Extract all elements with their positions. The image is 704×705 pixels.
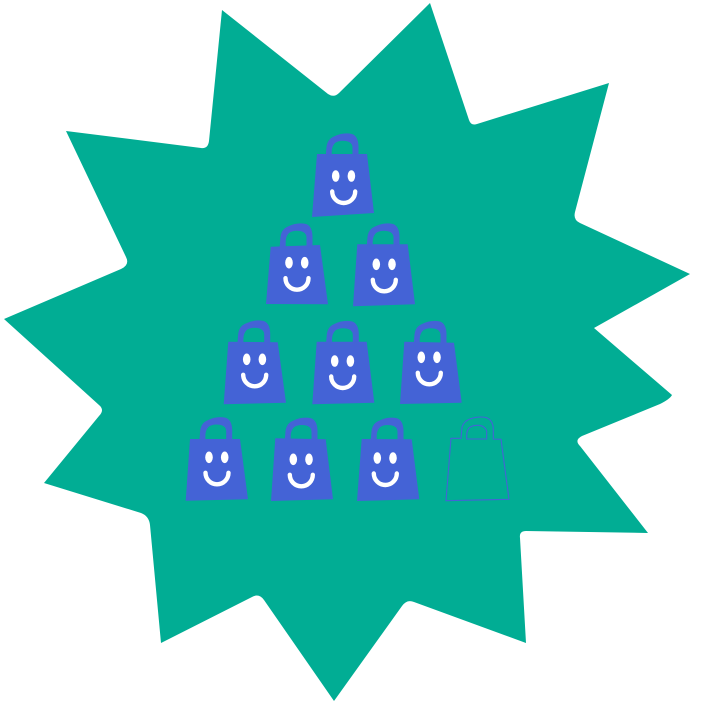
bag 4	[224, 320, 286, 404]
bag 7	[186, 417, 248, 501]
bag 1	[312, 133, 374, 217]
bag 6	[400, 321, 462, 404]
bag row 1	[312, 133, 374, 217]
bag 2	[266, 223, 328, 304]
bag 5	[312, 321, 374, 404]
empty outline bag	[446, 417, 509, 501]
bag row 4	[186, 417, 509, 501]
bag 8	[271, 418, 333, 501]
bag 9	[357, 418, 419, 501]
bag row 2	[266, 223, 415, 306]
bag row 3	[224, 320, 462, 404]
bag 3	[353, 223, 415, 306]
